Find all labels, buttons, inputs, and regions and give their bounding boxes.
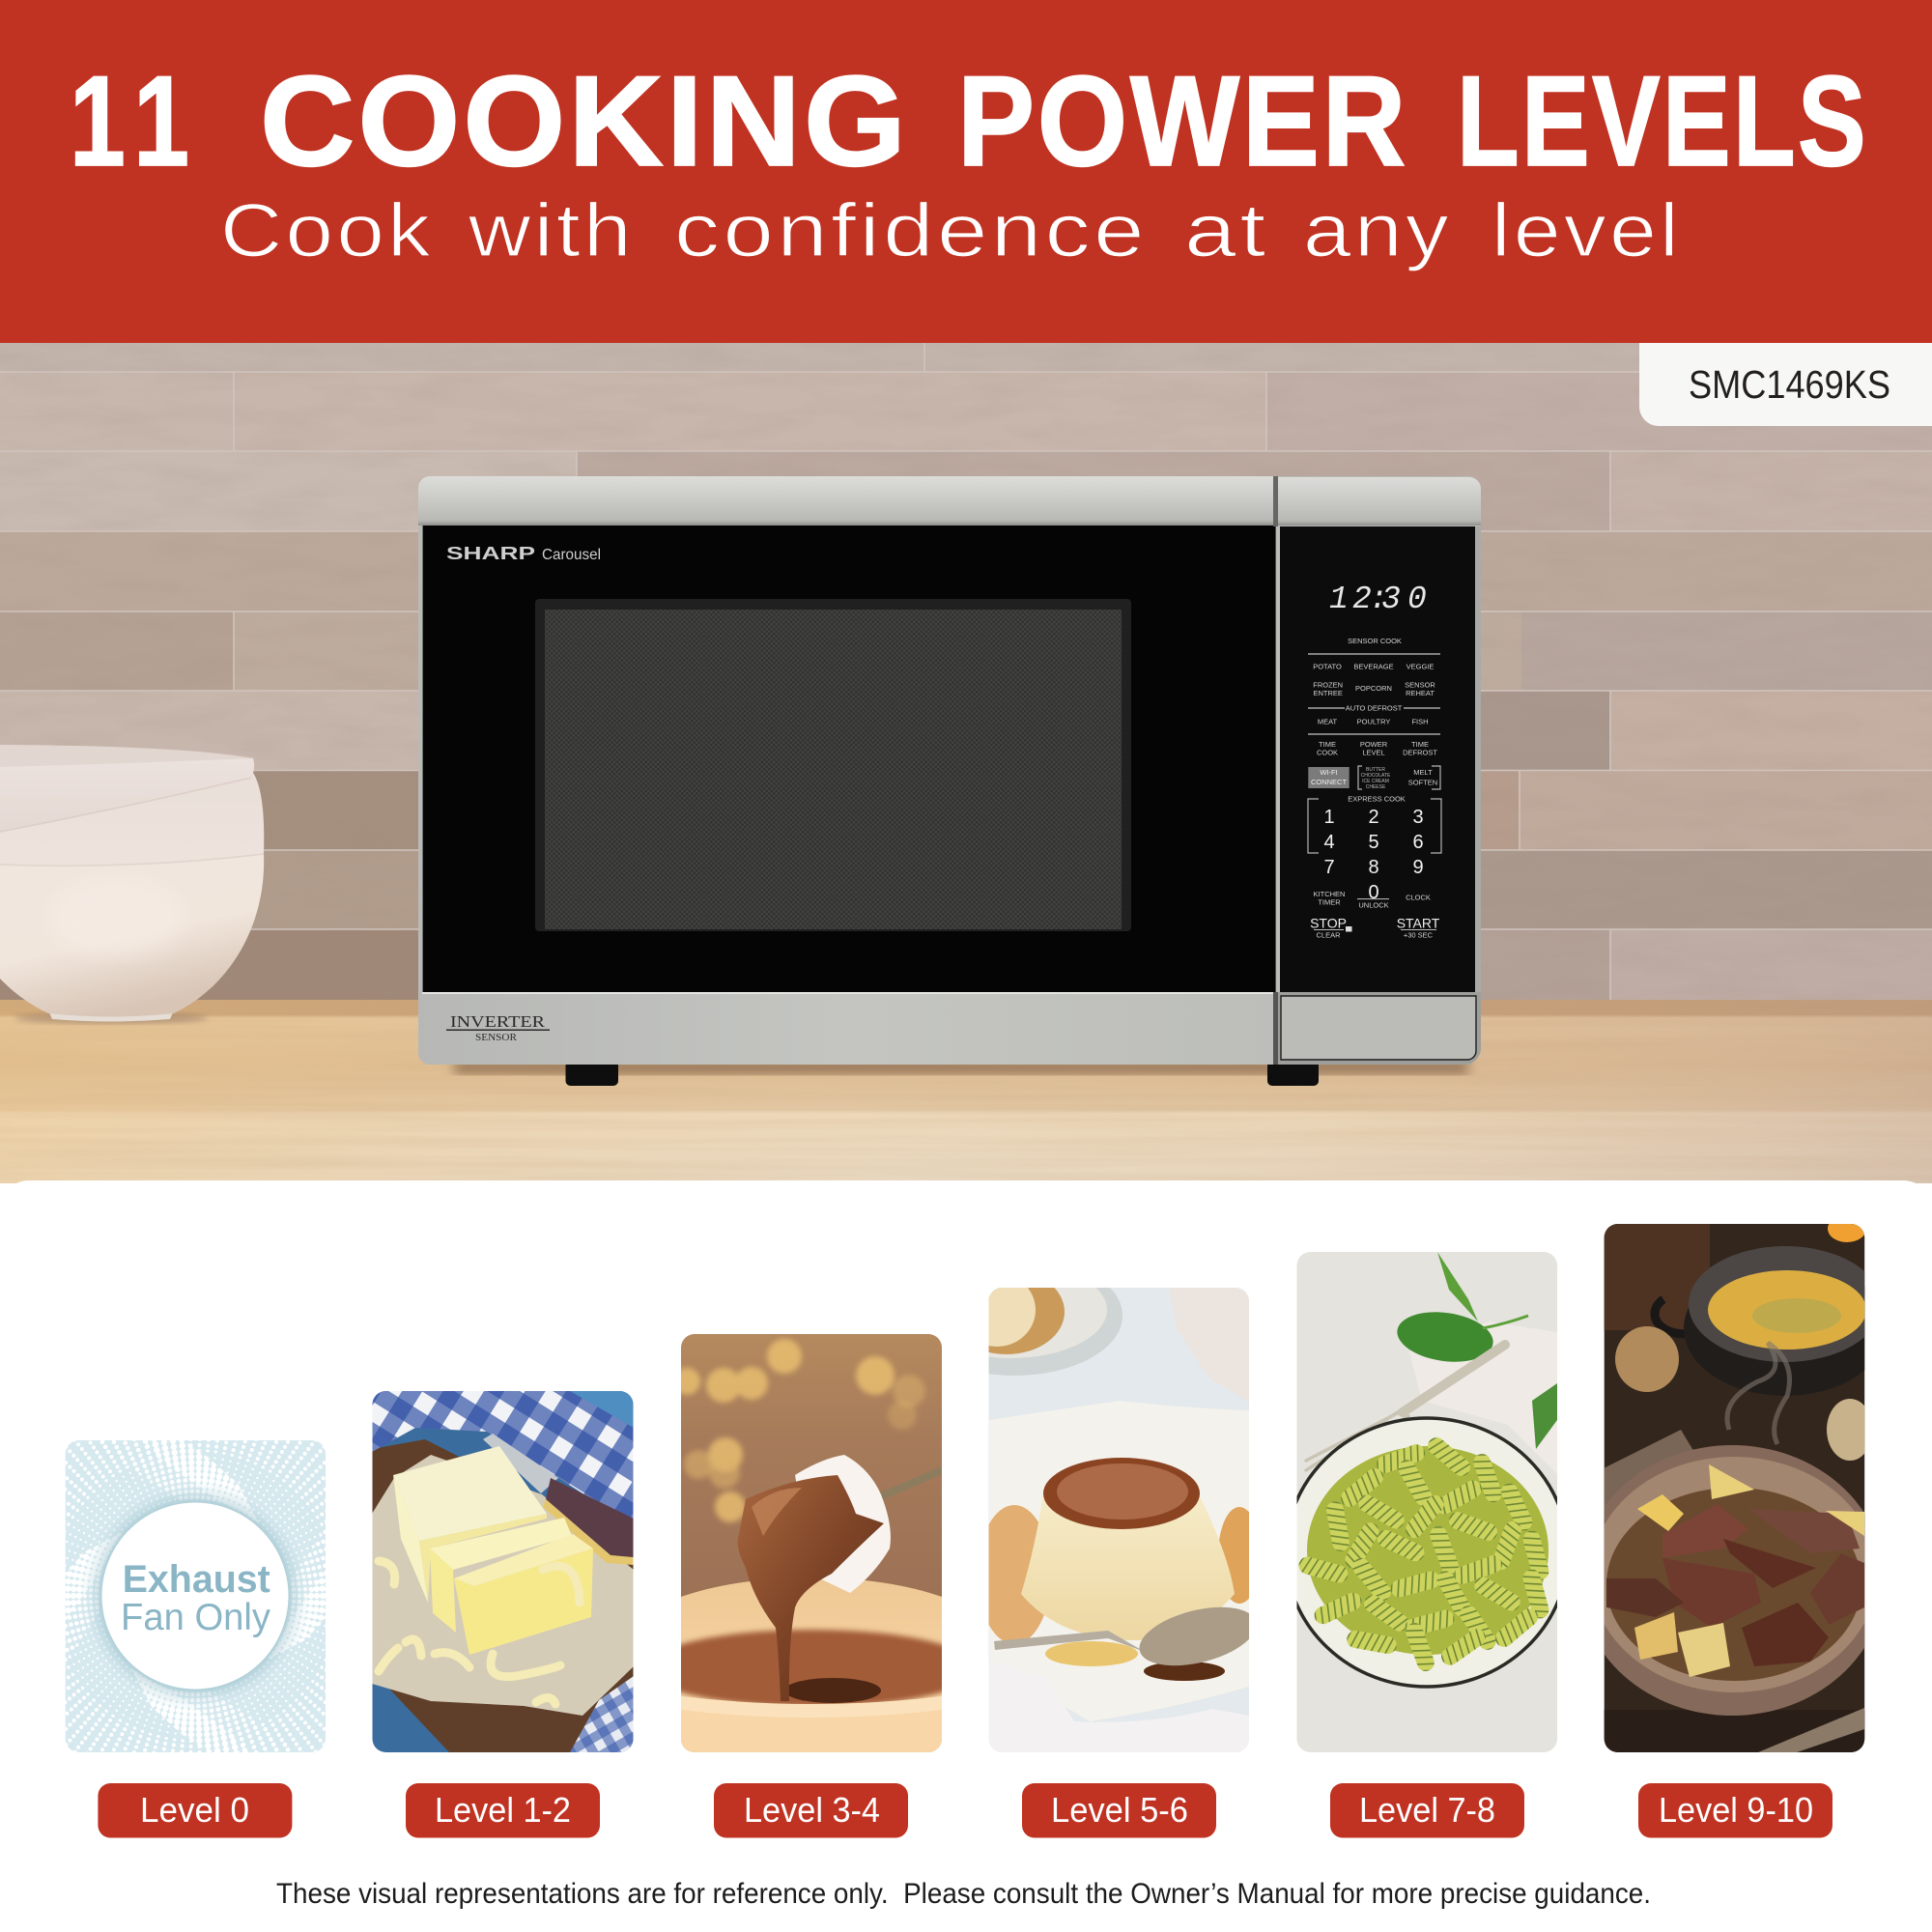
bottom keys: CLEAR [1316, 931, 1341, 939]
pot [1655, 1246, 1887, 1396]
parchment [372, 1455, 634, 1716]
wifi connect key: CONNECT [1311, 778, 1347, 786]
spoon [994, 1607, 1249, 1665]
marshmallow [795, 1455, 891, 1593]
stew plate [1579, 1445, 1885, 1716]
panel right trim [1475, 526, 1481, 992]
sensor cook keys: POWER [1360, 740, 1388, 749]
clock display: 12:30 [1329, 582, 1427, 617]
subtitle: confidence [674, 187, 1148, 272]
knife [483, 1434, 634, 1565]
card: Level 7-8 pesto pasta photo [1286, 1252, 1568, 1752]
express cook keys: CHEESE [1366, 784, 1386, 790]
sensor cook keys: REHEAT [1406, 689, 1435, 697]
number pad: 9 [1412, 857, 1424, 878]
bottom keys: KITCHEN [1314, 890, 1345, 898]
linen [988, 1662, 1249, 1752]
basil leaves [1394, 1252, 1557, 1449]
stew potatoes [1634, 1464, 1864, 1677]
dark caramel under spoon [1144, 1662, 1225, 1681]
control panel top band [1278, 477, 1481, 526]
sensor cook keys: AUTO DEFROST [1346, 703, 1403, 713]
sensor cook keys: TIME [1319, 740, 1336, 749]
level labels [98, 1783, 1833, 1837]
stacked bowls [0, 745, 264, 1024]
bottom keys: CLOCK [1406, 893, 1431, 902]
number pad: 4 [1323, 832, 1335, 853]
sensor cook keys: FROZEN [1313, 680, 1343, 690]
label: Level 1-2: Level 1-2 [435, 1790, 571, 1830]
side bowl [1827, 1399, 1873, 1461]
bottom keys [1310, 890, 1440, 939]
door bottom band [418, 992, 1273, 1065]
microwave body [418, 476, 1481, 1065]
number pad: 0 [1368, 882, 1379, 903]
label: Level 7-8 [1330, 1783, 1524, 1837]
express cook keys: MELT [1413, 768, 1433, 777]
inverter badge [446, 1012, 550, 1043]
background photo: kitchen wall [0, 343, 1932, 1000]
red header band [0, 0, 1932, 343]
inverter badge: SENSOR [475, 1033, 517, 1043]
plate [1286, 1418, 1568, 1687]
melted chocolate pool [681, 1626, 942, 1704]
label: Level 0: Level 0 [140, 1790, 249, 1830]
brand logo: SHARP [446, 544, 535, 563]
model tag: SMC1469KS [1689, 362, 1890, 407]
background plate [989, 1288, 1122, 1376]
express cook keys [1308, 766, 1441, 853]
card: Level 1-2 butter photo [372, 1391, 634, 1752]
sensor cook keys: DEFROST [1403, 748, 1437, 756]
label: Level 3-4 [714, 1783, 908, 1837]
cloth [372, 1391, 634, 1526]
card: Level 9-10 beef stew photo [1579, 1215, 1887, 1752]
pasta [1297, 1434, 1550, 1674]
card: Level 5-6 flan photo [989, 1288, 1249, 1752]
label: Level 1-2 [406, 1783, 600, 1837]
sensor cook keys: FISH [1411, 717, 1429, 726]
sensor cook keys: POULTRY [1357, 717, 1390, 726]
number pad: 5 [1368, 832, 1379, 853]
bokeh lights [673, 1339, 925, 1522]
board [372, 1439, 634, 1752]
label: Level 3-4: Level 3-4 [744, 1790, 880, 1830]
sensor cook keys: MEAT [1318, 717, 1338, 726]
brand logo [446, 544, 601, 563]
number pad: 1 [1323, 807, 1335, 828]
bowl [681, 1579, 942, 1700]
sensor cook keys: BEVERAGE [1353, 663, 1394, 670]
caramel sauce [978, 1505, 1261, 1666]
chocolate coating and drip [738, 1475, 884, 1701]
fan label circle: Exhaust [123, 1558, 270, 1601]
title: 11 [70, 50, 203, 193]
bottom keys: TIMER [1318, 898, 1341, 906]
inverter badge: INVERTER [450, 1012, 546, 1031]
butter block [393, 1446, 547, 1541]
express cook keys: SOFTEN [1408, 779, 1437, 786]
subtitle: any [1303, 187, 1452, 272]
steam [1727, 1343, 1789, 1444]
label: Level 9-10 [1638, 1783, 1833, 1837]
subtitle: at [1184, 187, 1269, 272]
main plate [989, 1401, 1249, 1721]
title: COOKING [260, 50, 909, 193]
butter slice [430, 1518, 572, 1570]
card: Level 0 exhaust fan [66, 1440, 326, 1752]
door release button [1278, 992, 1481, 1065]
flame [1828, 1215, 1866, 1242]
microwave feet [566, 1061, 1319, 1086]
bottom keys: STOP [1310, 916, 1347, 931]
bottom keys: +30 SEC [1404, 931, 1434, 939]
title [70, 50, 1868, 193]
potato [1615, 1326, 1679, 1392]
label: Level 7-8: Level 7-8 [1359, 1790, 1495, 1830]
label: Level 5-6 [1022, 1783, 1216, 1837]
subtitle: with [468, 187, 635, 272]
sensor cook keys: SENSOR [1405, 680, 1435, 690]
model tag [1639, 343, 1932, 426]
fan label circle: Fan Only [121, 1597, 270, 1638]
butter shavings [379, 1561, 580, 1704]
butter front slice [454, 1534, 593, 1586]
sensor cook keys: COOK [1317, 748, 1338, 756]
sensor cook keys: SENSOR COOK [1348, 637, 1402, 645]
sensor cook keys: TIME [1411, 740, 1429, 749]
express cook keys: ICE CREAM [1362, 779, 1389, 784]
wifi connect key: WI-FI [1320, 768, 1338, 777]
number pad: 8 [1368, 857, 1379, 878]
background photo: wooden counter [0, 1000, 1932, 1183]
sensor cook keys: POTATO [1313, 663, 1342, 670]
sensor cook keys: POPCORN [1355, 684, 1392, 693]
subtitle [220, 187, 1682, 272]
door window [535, 599, 1131, 931]
sensor cook keys: ENTREE [1313, 689, 1343, 697]
subtitle: level [1492, 187, 1682, 272]
number pad: 6 [1412, 832, 1424, 853]
wifi connect key [1308, 767, 1350, 788]
microwave [418, 476, 1481, 1086]
spoon [874, 1470, 942, 1499]
door to panel seam [1273, 476, 1279, 1065]
fork [1306, 1345, 1505, 1478]
bottom keys: START [1397, 916, 1440, 931]
footer disclaimer: These visual representations are for reference only. Please consult the Owner’s Manual for more precise guidance. [276, 1878, 1651, 1910]
napkin [1409, 1321, 1557, 1474]
number pad: 2 [1368, 807, 1379, 828]
label: Level 9-10: Level 9-10 [1659, 1790, 1813, 1830]
door top band [418, 476, 1273, 526]
white content panel [0, 1180, 1932, 1932]
card: Level 3-4 melted chocolate photo [681, 1334, 942, 1752]
sensor cook keys: LEVEL [1362, 748, 1385, 756]
brand logo: Carousel [542, 547, 601, 563]
label: Level 5-6: Level 5-6 [1051, 1790, 1188, 1830]
bottom keys: UNLOCK [1358, 900, 1389, 910]
label: Level 0 [98, 1783, 292, 1837]
fan label circle [102, 1503, 288, 1689]
number pad: 3 [1412, 807, 1424, 828]
sensor cook keys: VEGGIE [1406, 663, 1434, 670]
flan [1021, 1494, 1235, 1640]
control panel [1280, 526, 1475, 992]
number pad: 7 [1323, 857, 1335, 878]
express cook keys: EXPRESS COOK [1348, 794, 1406, 804]
subtitle: Cook [220, 187, 434, 272]
stew meat [1606, 1504, 1864, 1666]
express cook keys: BUTTER [1366, 767, 1385, 773]
number pad [1323, 807, 1424, 903]
express cook keys: CHOCOLATE [1361, 773, 1391, 779]
microwave shadow [454, 1061, 1468, 1074]
door glass [423, 526, 1276, 992]
doily [1169, 1288, 1249, 1403]
title: POWER [957, 50, 1408, 193]
sensor cook keys [1308, 637, 1440, 756]
